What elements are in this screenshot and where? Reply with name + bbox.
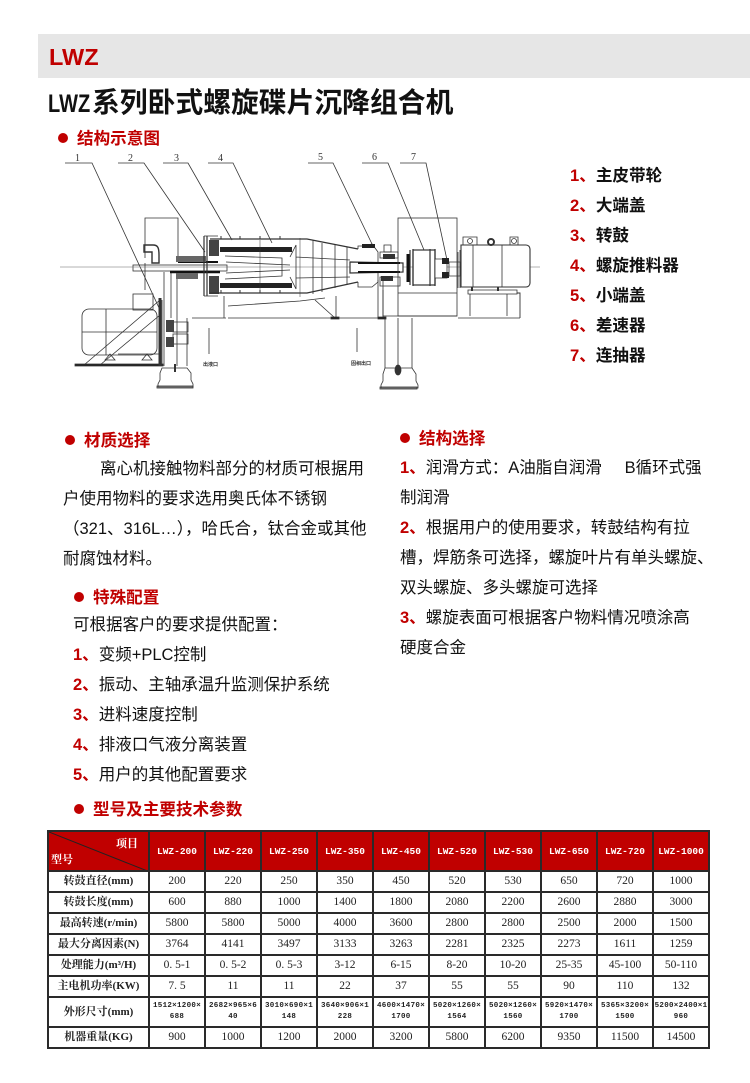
parameter table: LWZ-250 — [269, 846, 309, 856]
text: special configuration — [73, 616, 330, 784]
leader lines and numbers: 3 — [174, 153, 179, 164]
leader lines and numbers: 6 — [372, 152, 377, 163]
parameter table: 600 — [168, 896, 186, 908]
parameter table: 机器重量(KG) — [64, 1031, 133, 1043]
parameter table: LWZ-450 — [381, 846, 421, 856]
parameter table: 1700 — [559, 1013, 579, 1021]
parameter table: 1560 — [503, 1013, 523, 1021]
parameter table: 3000 — [670, 896, 692, 908]
part 3: 3、转鼓 — [570, 226, 629, 245]
heading: materials: 材质选择 — [84, 431, 150, 450]
parameter table: 3263 — [390, 938, 412, 950]
parameter table: 148 — [282, 1013, 296, 1021]
parameter table: 3010×690×1 — [265, 1002, 313, 1010]
parameter table: 1000 — [278, 896, 300, 908]
parameter table: 350 — [336, 875, 354, 887]
parameter table: 25-35 — [556, 959, 582, 971]
parameter table: 4141 — [222, 938, 244, 950]
parameter table: 2000 — [334, 1031, 356, 1043]
part 7: 7、连抽器 — [570, 346, 646, 365]
parameter table: 2080 — [446, 896, 468, 908]
parameter table: LWZ-720 — [605, 846, 645, 856]
parameter table: 520 — [448, 875, 466, 887]
text: materials — [63, 460, 366, 568]
outlet labels — [203, 328, 371, 368]
main shaft — [60, 256, 540, 279]
leader lines and numbers — [65, 152, 447, 310]
parameter table: 1200 — [278, 1031, 300, 1043]
parameter table: 6-15 — [390, 959, 412, 971]
text: structure options: 硬度合金 — [400, 639, 466, 657]
parameter table: 3640×906×1 — [321, 1002, 369, 1010]
text: special configuration: 可根据客户的要求提供配置： — [73, 616, 288, 634]
parameter table: 5200×2400×1 — [655, 1002, 707, 1010]
parameter table: 14500 — [667, 1031, 695, 1043]
parameter table: 132 — [672, 980, 690, 992]
outlet labels: 出液口 — [203, 361, 218, 368]
header band — [38, 34, 750, 78]
text: materials: （321、316L…），哈氏合，钛合金或其他 — [63, 520, 366, 538]
structure diagram — [60, 152, 540, 390]
parameter table: 200 — [168, 875, 186, 887]
parameter table: 37 — [395, 980, 407, 992]
parameter table: 转鼓长度(mm) — [64, 896, 133, 908]
parameter table: 450 — [392, 875, 410, 887]
text: materials: 户使用物料的要求选用奥氏体不锈钢 — [63, 490, 327, 508]
parameter table: 型号 — [51, 851, 73, 867]
parameter table: 3497 — [278, 938, 300, 950]
text: special configuration: 3、进料速度控制 — [73, 706, 198, 724]
text: structure options: 2、根据用户的使用要求，转鼓结构有拉 — [400, 519, 690, 537]
parameter table: 55 — [451, 980, 463, 992]
text: structure options — [400, 458, 714, 657]
parameter table: 11500 — [611, 1031, 639, 1043]
text: special configuration: 4、排液口气液分离装置 — [73, 736, 247, 754]
heading: special configuration: 特殊配置 — [93, 588, 159, 607]
parameter table: 688 — [170, 1013, 184, 1021]
parameter table: 4600×1470× — [377, 1002, 425, 1010]
parameter table: 4000 — [334, 917, 356, 929]
outlet labels: 固相出口 — [351, 360, 371, 367]
parameter table: 1800 — [390, 896, 412, 908]
parameter table: 5920×1470× — [545, 1002, 593, 1010]
text: structure options: 双头螺旋、多头螺旋可选择 — [400, 579, 598, 597]
part 5: 5、小端盖 — [570, 286, 646, 305]
parameter table: LWZ-350 — [325, 846, 365, 856]
parameter table: 90 — [563, 980, 575, 992]
parameter table: LWZ-530 — [493, 846, 533, 856]
parameter table: 45-100 — [609, 959, 641, 971]
parameter table: 11 — [227, 980, 239, 992]
parameter table: 2800 — [502, 917, 524, 929]
parameter table: 2281 — [446, 938, 468, 950]
parameter table: 22 — [339, 980, 351, 992]
parameter table: LWZ-520 — [437, 846, 477, 856]
text: materials: 耐腐蚀材料。 — [63, 550, 162, 568]
parameter table: 5000 — [278, 917, 300, 929]
part 2: 2、大端盖 — [570, 196, 646, 215]
parameter table: 5020×1260× — [433, 1002, 481, 1010]
parameter table: 外形尺寸(mm) — [64, 1006, 133, 1018]
parameter table: 2600 — [558, 896, 580, 908]
parameter table: 2880 — [614, 896, 636, 908]
parameter table: 5800 — [446, 1031, 468, 1043]
parameter table: 720 — [616, 875, 634, 887]
parameter table: 3-12 — [334, 959, 356, 971]
parameter table: 8-20 — [446, 959, 468, 971]
text: structure options: 槽，焊筋条可选择，螺旋叶片有单头螺旋、 — [400, 549, 714, 567]
differential and coupling housing — [383, 218, 460, 316]
part 6: 6、差速器 — [570, 316, 646, 335]
left motor and base — [75, 294, 163, 366]
parameter table: 2682×965×6 — [209, 1002, 257, 1010]
parameter table — [47, 830, 710, 1049]
parameter table: 1564 — [447, 1013, 467, 1021]
parameter table: 10-20 — [500, 959, 526, 971]
parameter table: 1611 — [614, 938, 636, 950]
parameter table: 0. 5-2 — [220, 959, 246, 971]
parameter table: 2273 — [558, 938, 580, 950]
parameter table: 主电机功率(KW) — [58, 980, 139, 992]
leader lines and numbers: 7 — [411, 152, 416, 163]
parameter table: 处理能力(m³/H) — [61, 959, 136, 971]
heading: model parameters: 型号及主要技术参数 — [93, 800, 242, 819]
parameter table: 2200 — [502, 896, 524, 908]
parameter table: 5800 — [222, 917, 244, 929]
leader lines and numbers: 2 — [128, 153, 133, 164]
parameter table: 0. 5-3 — [276, 959, 302, 971]
left bearing stand and foot — [157, 272, 193, 388]
parameter table: 55 — [507, 980, 519, 992]
parameter table: 0. 5-1 — [164, 959, 190, 971]
parameter table: 110 — [617, 980, 633, 992]
text: special configuration: 5、用户的其他配置要求 — [73, 766, 247, 784]
parameter table: 2800 — [446, 917, 468, 929]
left housing — [144, 218, 178, 290]
parameter table: 项目 — [116, 835, 138, 851]
parameter table: 最高转速(r/min) — [60, 917, 137, 929]
title: LWZ — [48, 90, 90, 118]
parameter table: 40 — [228, 1013, 238, 1021]
parameter table: 650 — [560, 875, 578, 887]
parameter table: 250 — [280, 875, 298, 887]
parameter table: 最大分离因素(N) — [58, 938, 139, 950]
heading: structure diagram: 结构示意图 — [77, 129, 160, 148]
text: structure options: 1、润滑方式：A油脂自润滑 B循环式强 — [400, 459, 702, 477]
leader lines and numbers: 1 — [75, 153, 80, 164]
parameter table: 3600 — [390, 917, 412, 929]
parameter table: 9350 — [558, 1031, 580, 1043]
title: 系列卧式螺旋碟片沉降组合机 — [92, 87, 453, 118]
parameter table: 220 — [224, 875, 242, 887]
parameter table: 5365×3200× — [601, 1002, 649, 1010]
parts legend — [570, 166, 679, 365]
parameter table: 1700 — [391, 1013, 411, 1021]
parameter table: 3764 — [166, 938, 188, 950]
parameter table: 6200 — [502, 1031, 524, 1043]
parameter table: LWZ-200 — [157, 846, 197, 856]
frame rail and right foot — [192, 276, 520, 389]
parameter table: 转鼓直径(mm) — [64, 875, 133, 887]
parameter table: 3133 — [334, 938, 356, 950]
parameter table: 1512×1200× — [153, 1002, 201, 1010]
text: special configuration: 2、振动、主轴承温升监测保护系统 — [73, 676, 330, 694]
parameter table: 2500 — [558, 917, 580, 929]
text: materials: 离心机接触物料部分的材质可根据用 — [100, 460, 364, 478]
parameter table: LWZ-1000 — [658, 846, 704, 856]
leader lines and numbers: 4 — [218, 153, 223, 164]
parameter table: LWZ-220 — [213, 846, 253, 856]
part 4: 4、螺旋推料器 — [570, 256, 679, 275]
parameter table: 5800 — [166, 917, 188, 929]
text: special configuration: 1、变频+PLC控制 — [73, 646, 206, 664]
parameter table: 960 — [674, 1013, 688, 1021]
parameter table: 5020×1260× — [489, 1002, 537, 1010]
parameter table: 2000 — [614, 917, 636, 929]
text: structure options: 制润滑 — [400, 489, 450, 507]
parameter table: 1000 — [670, 875, 692, 887]
parameter table: 3200 — [390, 1031, 412, 1043]
parameter table: LWZ-650 — [549, 846, 589, 856]
parameter table: 7. 5 — [168, 980, 186, 992]
drum — [204, 236, 358, 297]
heading: structure options: 结构选择 — [419, 429, 485, 448]
parameter table: 1259 — [670, 938, 692, 950]
brand label: LWZ — [49, 44, 99, 70]
parameter table: 228 — [338, 1013, 352, 1021]
right motor — [458, 237, 530, 318]
parameter table: 900 — [168, 1031, 186, 1043]
parameter table: 1000 — [222, 1031, 244, 1043]
part 1: 1、主皮带轮 — [570, 166, 662, 185]
parameter table: 1500 — [670, 917, 692, 929]
text: structure options: 3、螺旋表面可根据客户物料情况喷涂高 — [400, 609, 690, 627]
small end and bearing — [350, 244, 403, 287]
parameter table: 1500 — [615, 1013, 635, 1021]
leader lines and numbers: 5 — [318, 152, 323, 163]
parameter table: 1400 — [334, 896, 356, 908]
parameter table: 530 — [504, 875, 522, 887]
parameter table: 50-110 — [665, 959, 697, 971]
parameter table: 2325 — [502, 938, 524, 950]
parameter table: 11 — [283, 980, 295, 992]
parameter table: 880 — [224, 896, 242, 908]
